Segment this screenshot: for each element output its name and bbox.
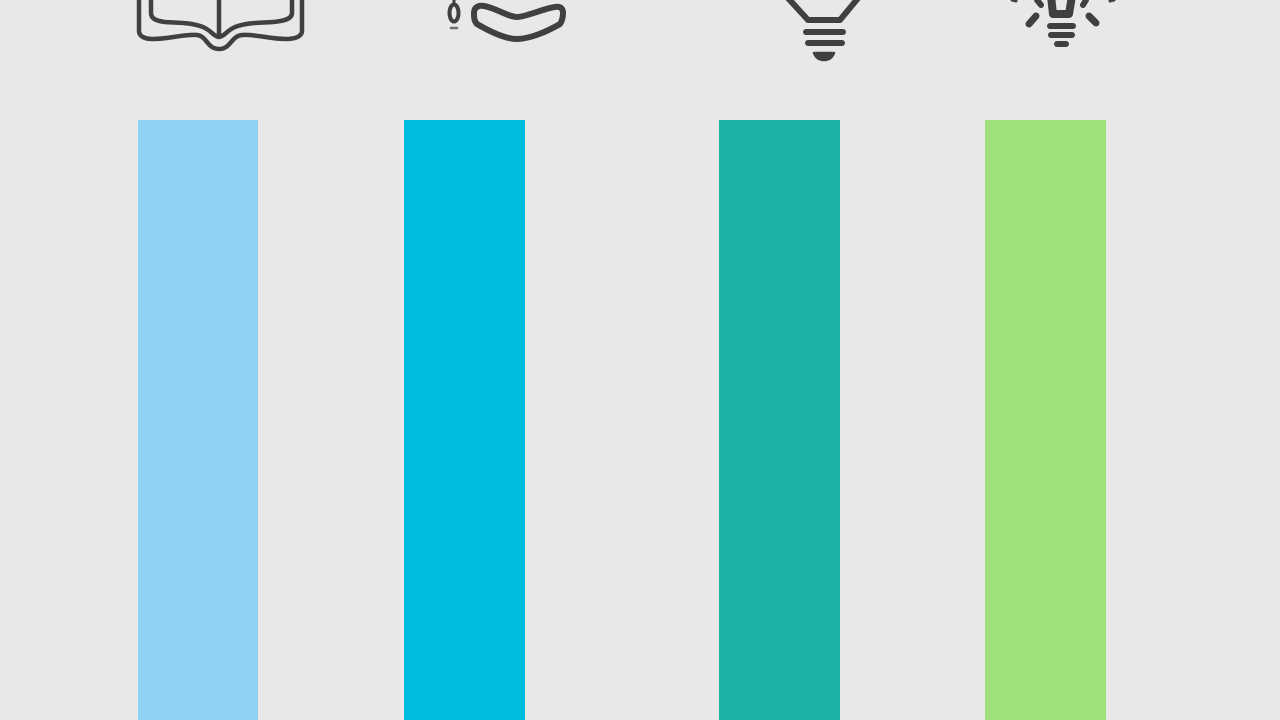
bar: light blue [138,120,258,720]
icon: open book [139,0,302,49]
bar: cyan [404,120,525,720]
icon: light bulb [787,0,859,60]
cap band [474,6,563,39]
icon: shining light bulb [1012,0,1114,44]
icon: graduation cap [450,0,563,39]
cap tassel [450,4,458,22]
bar: teal [719,120,840,720]
bar: light green [985,120,1106,720]
